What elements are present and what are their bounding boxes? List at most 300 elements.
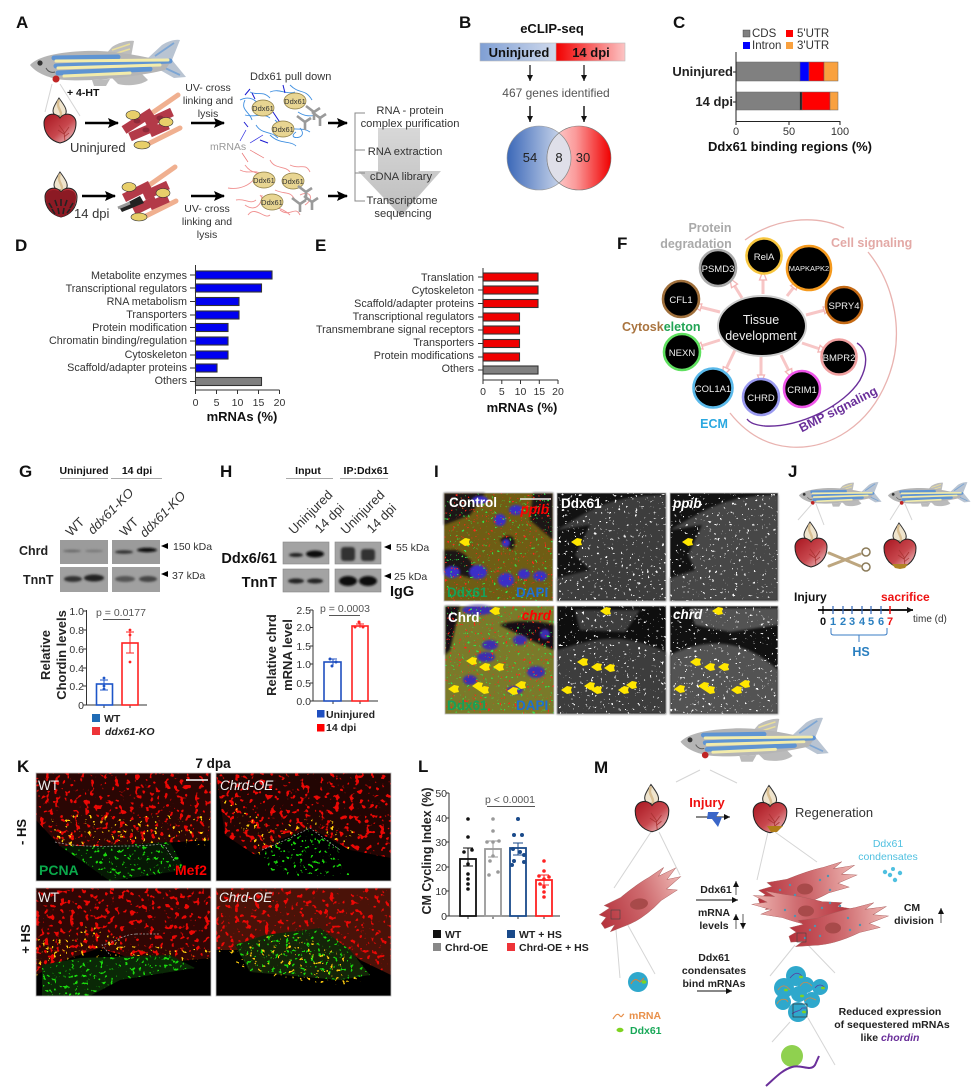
image: chrd channel [670, 606, 778, 714]
tick numbers [193, 397, 285, 409]
zebrafish illustration [30, 40, 186, 86]
tick numbers [296, 605, 311, 708]
gene labels: RelA [754, 252, 775, 263]
header lines [60, 478, 162, 480]
category labels: Scaffold/adapter proteins [67, 362, 188, 374]
pull down title: Ddx61 pull down [250, 71, 331, 83]
axis title: mRNAs (%) [207, 409, 277, 424]
panel B: eCLIP-seq venn [459, 13, 625, 190]
molecular weight markers: 37 kDa [172, 570, 205, 582]
condensates label [858, 838, 918, 863]
category labels: Cytoskeleton [622, 320, 700, 334]
text: UV crosslinking lower: linking and [182, 216, 232, 228]
legend: WT [104, 713, 121, 725]
icon: healthy heart [635, 784, 669, 832]
tick numbers: 10 [435, 886, 447, 898]
condensates label: condensates [858, 851, 918, 863]
legend: CDS [752, 28, 777, 40]
panel E: mRNAs bar chart red [315, 236, 564, 415]
timeline [794, 590, 947, 659]
tick numbers: 1.0 [69, 606, 84, 618]
heading 7 dpa: 7 dpa [195, 756, 231, 771]
icon: uninjured heart [44, 98, 76, 143]
4-HT label: + 4-HT [67, 87, 100, 99]
icon: condensate cluster [774, 966, 828, 1022]
panel label K: K [17, 757, 30, 776]
timeline numbers: 0 [820, 616, 826, 628]
axes [190, 265, 280, 394]
panel label H: H [220, 462, 232, 481]
legend: Intron [752, 40, 781, 52]
text: reduced expression: of sequestered mRNAs [834, 1019, 950, 1031]
lane labels: Uninjured [286, 487, 335, 537]
timeline numbers: 5 [868, 616, 874, 628]
blot labels: TnnT [242, 575, 277, 591]
heading eCLIP-seq: eCLIP-seq [520, 21, 584, 36]
text: CM division: CM [904, 902, 920, 914]
pink connecting arrows [700, 279, 825, 376]
panel label M: M [594, 758, 608, 777]
HS bracket [831, 628, 887, 642]
arrows to venn [530, 106, 584, 122]
bars [196, 271, 272, 386]
category labels: Others [442, 363, 475, 375]
category labels: 14 dpi [695, 94, 733, 109]
tick numbers: 10 [515, 386, 526, 398]
axis numbers [733, 126, 849, 138]
cardiomyocyte cluster 14 dpi [118, 167, 176, 221]
panel label F: F [617, 234, 627, 253]
regenerating cardiomyocytes [752, 860, 890, 947]
tick numbers: 5 [214, 397, 220, 409]
text: UV crosslinking lower: lysis [197, 229, 217, 241]
y label: mRNA level [280, 619, 295, 691]
text: mRNA levels: mRNA [698, 907, 730, 919]
headers: IP:Ddx61 [344, 465, 389, 477]
error bars and dots [100, 629, 134, 690]
image labels: ppib [520, 502, 549, 517]
tick numbers [69, 606, 84, 712]
arrows to genes [530, 65, 584, 81]
category labels [316, 272, 475, 375]
blot Chrd [60, 540, 160, 564]
image: Chrd-OE +HS [216, 888, 391, 996]
arrow up [735, 881, 737, 895]
bars [96, 684, 112, 705]
injury label: Injury [689, 795, 725, 810]
legend [317, 709, 375, 734]
central node: tissue development: development [725, 329, 797, 343]
channel labels: PCNA [39, 862, 79, 878]
size markers [384, 542, 429, 583]
category labels: ECM [700, 417, 728, 431]
axis numbers: 50 [783, 126, 795, 138]
row labels: + HS [18, 924, 33, 954]
image labels: chrd [522, 608, 552, 623]
image: control ppib [670, 493, 778, 601]
text: UV crosslinking lower: UV- cross [184, 203, 230, 215]
arrow: to pull down upper [191, 122, 224, 124]
text: reduced expression: Reduced expression [839, 1006, 941, 1018]
timeline: time (d) [913, 614, 947, 625]
panel label E: E [315, 236, 326, 255]
arrow: to pull down lower [191, 195, 224, 197]
category labels: Protein modification [92, 322, 187, 334]
image: WT +HS [36, 888, 211, 996]
text: UV crosslinking upper [183, 82, 233, 120]
cardiomyocyte cluster uninjured [124, 95, 180, 149]
text: CM division: division [894, 915, 934, 927]
text: mRNA levels: levels [699, 920, 729, 932]
image: control merge [444, 493, 553, 601]
image labels [447, 495, 703, 713]
blot labels [221, 551, 277, 591]
process steps text: cDNA library [370, 171, 432, 183]
text: UV crosslinking upper: linking and [183, 95, 233, 107]
legend: ddx61-KO [105, 726, 155, 738]
text: condensates bind: bind mRNAs [682, 978, 746, 990]
process steps text [361, 105, 459, 220]
tick numbers: 40 [435, 813, 447, 825]
icon: lightning [707, 812, 722, 827]
lane labels: WT [117, 514, 141, 539]
condition bar: Uninjured [489, 45, 549, 60]
panel label A: A [16, 13, 28, 32]
tick numbers: 20 [552, 386, 564, 398]
lane labels: Uninjured [338, 487, 387, 537]
red mRNA and Ddx61 complex: Ddx61 [253, 176, 275, 185]
Ddx61 proteins [252, 93, 306, 137]
lane labels [63, 485, 189, 540]
tick numbers: 0 [441, 911, 447, 923]
bars: 14 dpi [736, 92, 838, 110]
injury arrow [696, 816, 730, 818]
process steps text: sequencing [374, 208, 432, 220]
uninjured label: Uninjured [70, 140, 126, 155]
yellow arrows [448, 538, 750, 695]
axes [446, 793, 560, 919]
arrow: to purification lower [328, 195, 347, 197]
image labels: Ddx61 [447, 585, 488, 600]
regeneration label: Regeneration [795, 805, 873, 820]
image labels: Control [449, 495, 497, 510]
venn diagram [507, 126, 611, 190]
category labels: Protein [688, 221, 732, 235]
text: Ddx61 up: Ddx61 [700, 884, 732, 896]
blot labels: Chrd [19, 544, 48, 558]
legend: WT [445, 929, 462, 941]
text: condensates bind: Ddx61 [698, 952, 730, 964]
tick numbers: 15 [253, 397, 264, 409]
dots Chrd-OE [485, 817, 501, 877]
y label [38, 610, 69, 700]
condition bar [480, 43, 625, 61]
channel labels [39, 862, 207, 878]
image labels: ppib [672, 496, 702, 511]
gene labels: CFL1 [669, 295, 693, 306]
venn diagram: 30 [576, 150, 590, 165]
legend: 5'UTR [797, 28, 829, 40]
icon: regenerating heart [753, 786, 787, 833]
legend: 3'UTR [797, 40, 829, 52]
lane labels: WT [63, 514, 87, 539]
467 genes text: 467 genes identified [502, 86, 610, 100]
panel J: experimental timeline [788, 462, 971, 659]
axis numbers: 0 [733, 126, 739, 138]
lane labels: ddx61-KO [137, 488, 189, 540]
process steps text: RNA extraction [368, 146, 442, 158]
image labels: WT [38, 890, 59, 905]
panel label J: J [788, 462, 797, 481]
panel H: Ddx6/61 IP blot and chart [220, 462, 429, 734]
condition headers: 14 dpi [122, 465, 152, 477]
arrow up division [940, 908, 942, 923]
gene labels: COL1A1 [695, 384, 731, 395]
tick numbers: 2.5 [296, 605, 311, 617]
headers [295, 465, 389, 477]
image: control Ddx61 [557, 493, 666, 601]
legend: mRNA and Ddx61: Ddx61 [630, 1025, 662, 1037]
blot labels [19, 544, 54, 587]
magnification lines [45, 84, 80, 116]
tick numbers: 0.4 [69, 663, 84, 675]
category labels [622, 221, 912, 435]
y label: Chordin levels [54, 610, 69, 700]
condensates label: Ddx61 [873, 838, 903, 850]
bars: Uninjured [736, 62, 838, 81]
category labels: Protein modifications [374, 350, 475, 362]
tick numbers [480, 386, 564, 398]
timeline: Injury [794, 590, 827, 604]
red mRNA and Ddx61 complex: Ddx61 [261, 198, 283, 207]
gene labels: MAPKAPK2 [789, 264, 829, 273]
arrow: heart to cells 14 dpi [82, 195, 115, 197]
panel C: binding regions bar chart [672, 13, 872, 154]
gene nodes [663, 238, 862, 415]
gene labels: PSMD3 [702, 264, 734, 275]
bars [483, 273, 538, 374]
text: condensates bind [682, 952, 746, 990]
panel D: mRNAs bar chart blue [15, 236, 285, 424]
category labels: degradation [660, 237, 732, 251]
bars [460, 848, 552, 916]
p value: p = 0.0003 [320, 603, 370, 615]
p value: p < 0.0001 [485, 794, 535, 806]
image labels: Chrd-OE [219, 890, 273, 905]
condition headers [60, 465, 152, 477]
category labels: Transporters [413, 337, 475, 349]
dots WT + HS [510, 817, 526, 867]
image labels: Chrd-OE [220, 778, 274, 793]
tick numbers: 50 [435, 788, 447, 800]
zebrafish illustration [680, 718, 829, 762]
lane labels [286, 487, 399, 537]
magnification lines [614, 770, 835, 1065]
image: WT -HS [36, 773, 211, 881]
tick numbers: 10 [232, 397, 243, 409]
molecular weight markers: 150 kDa [173, 541, 212, 553]
tick numbers: 0.8 [69, 625, 84, 637]
axes [310, 610, 378, 704]
timeline numbers: 6 [878, 616, 884, 628]
legend: Chrd-OE [445, 942, 488, 954]
timeline numbers: 4 [859, 616, 866, 628]
icon: condensate dots [883, 867, 902, 882]
panel label C: C [673, 13, 685, 32]
image labels: DAPI [516, 585, 548, 600]
small arrows from mRNAs label [240, 130, 263, 143]
central node: tissue development: Tissue [743, 313, 779, 327]
tick numbers: 15 [533, 386, 545, 398]
tick numbers [435, 788, 447, 923]
process steps text: Transcriptome [366, 195, 438, 207]
legend: Uninjured [326, 709, 375, 721]
icon: heart before injury [795, 522, 827, 567]
legend [92, 713, 155, 738]
icon: Ddx61 bound to mRNA [766, 1045, 819, 1086]
size markers: 55 kDa [396, 542, 429, 554]
axes [478, 268, 558, 384]
condition headers: Uninjured [60, 465, 108, 477]
category labels: Transcriptional regulators [353, 311, 475, 323]
category labels: Transmembrane signal receptors [316, 324, 475, 336]
legend: WT + HS [519, 929, 562, 941]
lane labels: ddx61-KO [85, 485, 137, 537]
timeline: HS [852, 645, 870, 659]
headers: Input [295, 465, 321, 477]
lane labels: 14 dpi [364, 500, 399, 536]
tick numbers: 0.5 [296, 678, 311, 690]
chart: relative chrd mRNA [264, 603, 378, 734]
y label: Relative chrd [264, 614, 279, 696]
tick numbers: 0.2 [69, 681, 84, 693]
tick numbers: 20 [435, 862, 447, 874]
category labels: Uninjured [672, 64, 733, 79]
panel L: CM cycling index chart [418, 757, 589, 954]
red mRNA and Ddx61 complex: Ddx61 [282, 177, 304, 186]
text: reduced expression: like chordin [861, 1032, 919, 1044]
legend [743, 28, 829, 52]
category labels: Cell signaling [831, 236, 912, 250]
arrow: to purification upper [328, 122, 347, 124]
panel label D: D [15, 236, 27, 255]
large grey process arrow [358, 128, 441, 216]
condition bar: 14 dpi [572, 45, 610, 60]
image labels: WT [38, 778, 59, 793]
arrow to cluster [697, 990, 732, 992]
tick numbers: 20 [274, 397, 285, 409]
timeline numbers: 3 [849, 616, 855, 628]
axes [733, 52, 840, 125]
panel label B: B [459, 13, 471, 32]
y label: Relative [38, 630, 53, 680]
tick numbers: 1.0 [296, 659, 311, 671]
category labels: Translation [421, 272, 474, 284]
image labels: Ddx61 [447, 698, 488, 713]
red mRNA and Ddx61 complex [228, 160, 318, 216]
dots WT [462, 817, 474, 891]
category labels: Cytoskeleton [125, 349, 187, 361]
blot labels: Ddx6/61 [221, 551, 277, 567]
blot labels: TnnT [23, 573, 54, 587]
fish 2 [888, 482, 971, 507]
timeline numbers: 1 [830, 616, 836, 628]
dots [328, 620, 364, 668]
row labels: - HS [14, 819, 29, 845]
text: UV crosslinking lower [182, 203, 232, 241]
y label: CM Cycling Index (%) [420, 787, 434, 915]
blue mRNA and Ddx61 complex [240, 85, 326, 146]
axes [83, 610, 147, 708]
category labels: RNA metabolism [107, 296, 187, 308]
blot TnnT [283, 569, 381, 592]
gene labels: CHRD [747, 393, 775, 404]
icon: heart after injury [884, 523, 916, 568]
timeline numbers: 2 [840, 616, 846, 628]
Ddx61 proteins lower [253, 172, 304, 210]
bars [324, 662, 341, 701]
category labels: Cytoskeleton [412, 285, 474, 297]
blue mRNA and Ddx61 complex: Ddx61 [284, 97, 306, 106]
legend: Chrd-OE + HS [519, 942, 589, 954]
blue mRNA and Ddx61 complex: Ddx61 [272, 125, 294, 134]
gene labels: NEXN [669, 348, 695, 359]
scale bar [186, 779, 208, 781]
header lines [286, 478, 388, 480]
category labels: Metabolite enzymes [91, 270, 188, 282]
panel M: proposed model [591, 718, 950, 1086]
legend: mRNA and Ddx61: mRNA [629, 1010, 662, 1022]
molecular weight markers [161, 541, 212, 582]
image: chrd merge [445, 605, 554, 714]
p value: p = 0.0177 [96, 607, 146, 619]
icon: single condensate [628, 972, 648, 992]
magnification lines [798, 504, 912, 525]
central node: tissue development [718, 296, 806, 356]
BMP signaling arc [747, 343, 866, 426]
injured apex [767, 826, 783, 832]
process steps text: complex purification [361, 118, 459, 130]
gene labels: SPRY4 [829, 301, 859, 312]
amputated tissue mark [892, 564, 908, 569]
image: Chrd-OE -HS [216, 773, 391, 881]
category labels: BMP signaling [797, 384, 880, 435]
category labels: Transporters [126, 309, 188, 321]
tick numbers: 0 [480, 386, 486, 398]
panel F: tissue development network [617, 220, 912, 447]
category labels [49, 270, 188, 387]
axis numbers: 100 [831, 126, 849, 138]
timeline numbers [820, 616, 893, 628]
venn diagram: 8 [555, 150, 563, 165]
image labels: DAPI [516, 698, 548, 713]
timeline: sacrifice [881, 590, 930, 604]
panel A: eCLIP workflow [16, 13, 459, 241]
category labels: Transcriptional regulators [66, 283, 188, 295]
tick numbers: 0 [78, 700, 84, 712]
blot TnnT [60, 567, 160, 592]
category labels [672, 64, 733, 109]
image: chrd Ddx61 [557, 606, 666, 714]
blot Ddx6/61 [283, 542, 381, 564]
tick numbers: 0 [193, 397, 199, 409]
tick numbers: 2.0 [296, 622, 311, 634]
scale bar [520, 498, 551, 500]
tick numbers: 0.0 [296, 696, 311, 708]
axis title: Ddx61 binding regions (%) [708, 139, 872, 154]
lane labels: 14 dpi [312, 500, 347, 536]
fish 1 [799, 482, 882, 507]
